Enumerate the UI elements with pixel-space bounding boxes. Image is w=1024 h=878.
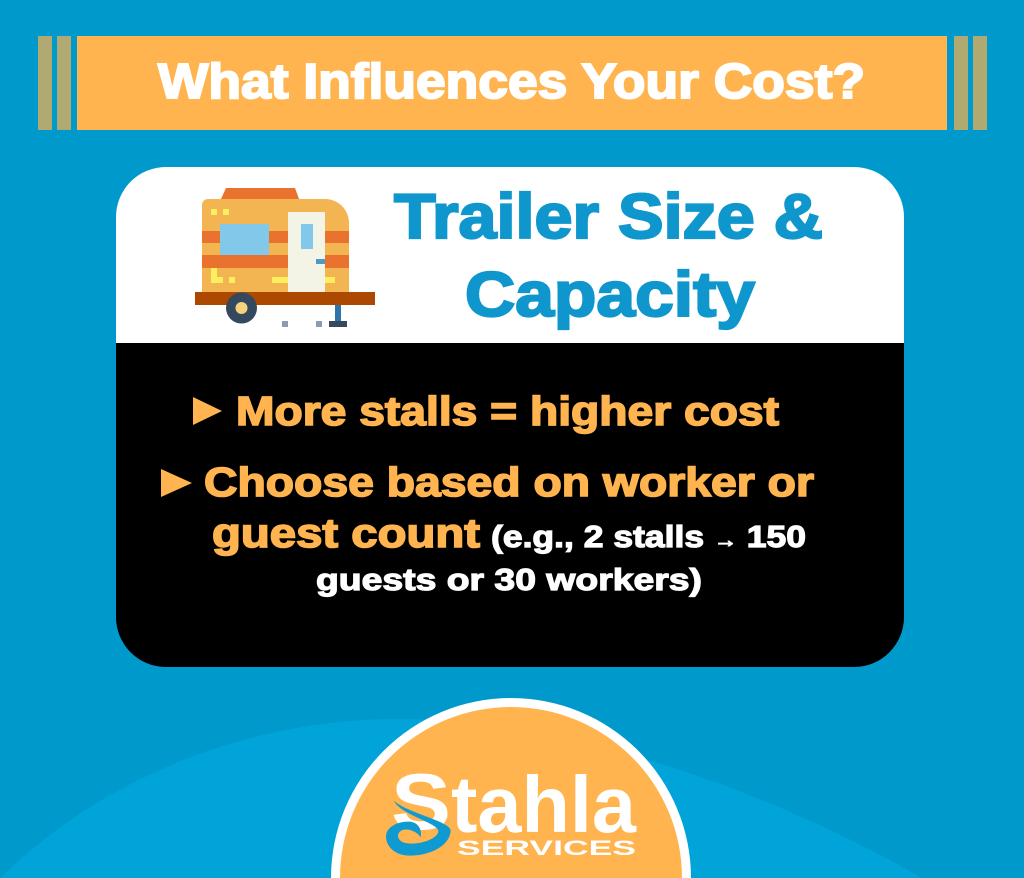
logo wordmark: tahla [451, 760, 637, 849]
bullet: choose based on count: Choose based on worker or [204, 459, 814, 505]
bullet: choose based on count: guests or 30 workers) [316, 562, 702, 597]
logo wordmark: S [391, 757, 451, 846]
icon: logo swirl [386, 801, 451, 856]
heading: trailer size and capacity: Capacity [465, 260, 755, 330]
title: What Influences Your Cost? [158, 55, 865, 109]
bullet: choose based on count [161, 459, 814, 597]
bullet: more stalls: More stalls = higher cost [236, 388, 779, 434]
bullet: choose based on count: (e.g., 2 stalls → 150 [491, 519, 806, 554]
heading: trailer size and capacity [394, 182, 823, 330]
logo wordmark: SERVICES [457, 837, 636, 860]
heading: trailer size and capacity: Trailer Size & [394, 182, 823, 252]
logo badge [331, 698, 691, 878]
icon: trailer [195, 188, 375, 327]
header banner [38, 36, 987, 130]
bullet: choose based on count: guest count [212, 510, 480, 556]
logo wordmark [391, 757, 637, 860]
panel: trailer size and capacity [116, 167, 904, 667]
